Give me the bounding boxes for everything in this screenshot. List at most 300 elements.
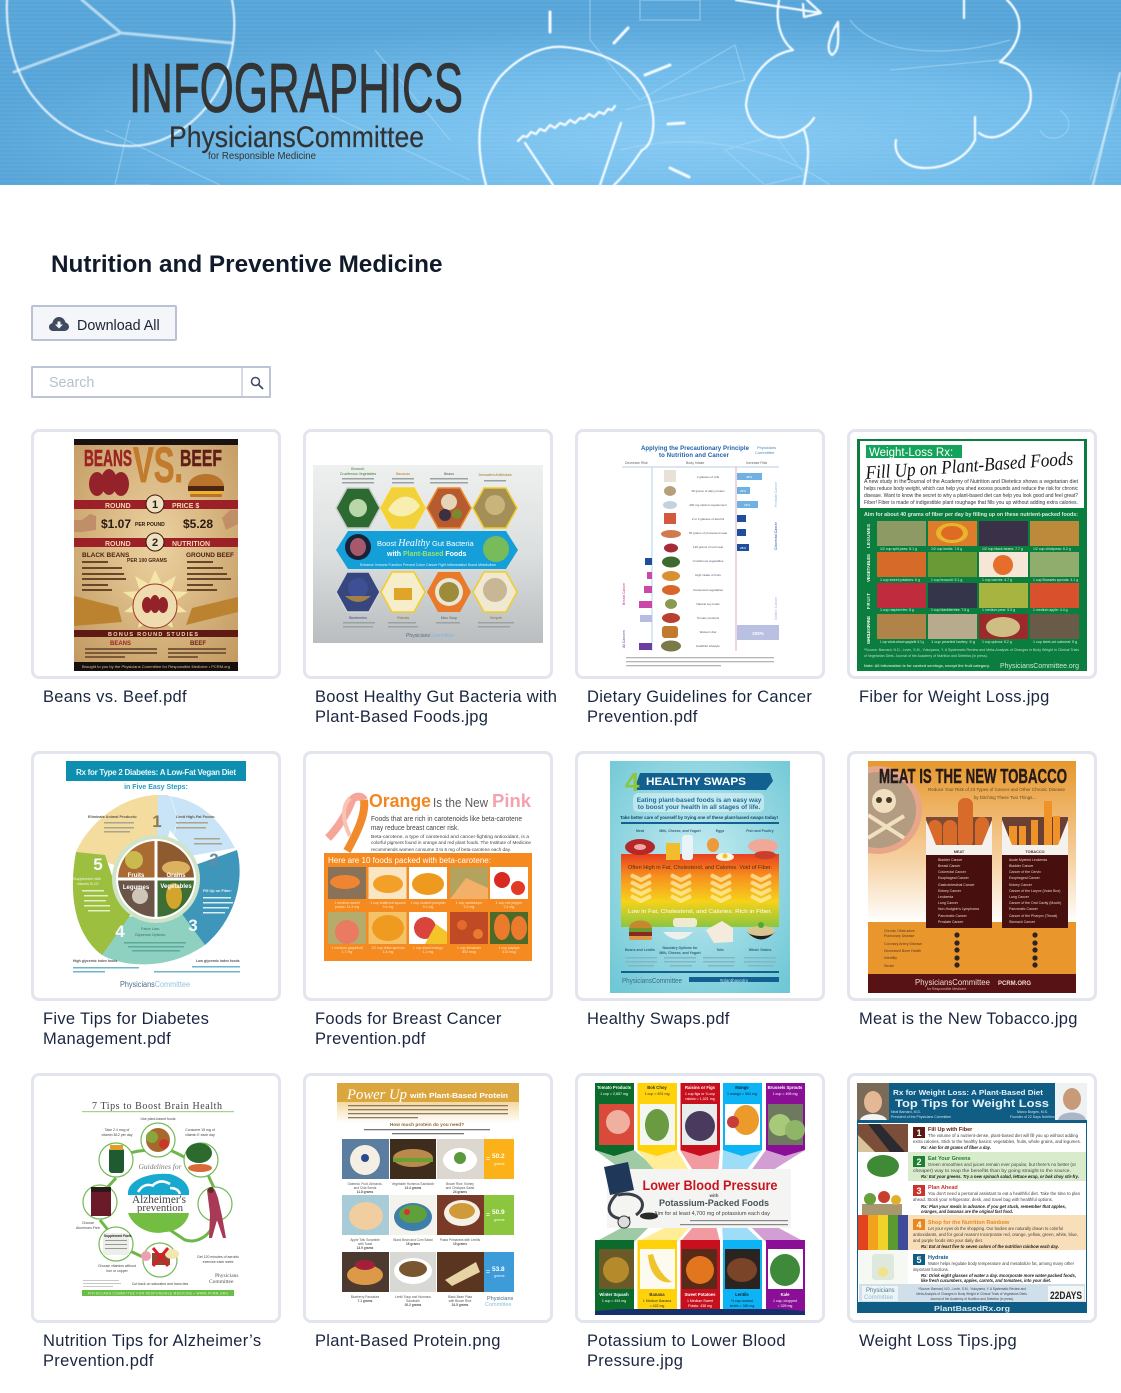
thumbnail: beans vs beef poster: ROUND — [105, 503, 131, 510]
thumbnail: meat tobacco poster: PCRM.ORG — [998, 981, 1031, 987]
thumbnail: weight loss tips poster: Rx: Aim for 40 grams of fiber a day. — [921, 1145, 991, 1150]
thumbnail: meat tobacco poster: Bladder Cancer — [938, 858, 963, 862]
caption: Weight Loss Tips.jpg — [859, 1332, 1017, 1350]
thumbnail: weight loss tips poster: Rx: Plan your meals in advance. If you get stuck, remember that apples, — [921, 1204, 1066, 1209]
thumbnail: gut bacteria poster: Blueberries — [349, 616, 367, 620]
thumbnail: weight loss tips poster: Fill Up with Fiber — [928, 1127, 973, 1133]
thumbnail: weight loss tips poster: oranges, and bananas are the original fast food. — [921, 1209, 1013, 1214]
caption — [587, 1332, 786, 1370]
thumbnail: meat tobacco poster: Kidney Cancer — [938, 889, 962, 893]
thumbnail: precautionary principle chart: Committee — [755, 450, 775, 455]
thumbnail: diabetes wheel: 1 — [152, 812, 162, 831]
thumbnail: precautionary principle chart: 28% — [740, 546, 746, 550]
thumbnail: fiber poster: 1 cup sweet potatoes: 6 g — [880, 578, 920, 582]
thumbnail: precautionary principle chart: to Nutrition and Cancer — [659, 453, 730, 459]
thumbnail: potassium poster: Sweet Potatoes — [685, 1292, 716, 1297]
thumbnail: potassium poster: Aim for at least 4,700 mg of potassium each day — [654, 1211, 770, 1217]
thumbnail: weight loss tips poster: Hydrate — [928, 1255, 948, 1261]
thumbnail: beans vs beef poster: NUTRITION — [172, 541, 210, 548]
thumbnail: fiber poster: Fiber! Fiber is made of indigestible plant roughage that fills you up without adding extra calories. — [864, 500, 1078, 506]
thumbnail: potassium poster: Banana — [649, 1292, 665, 1297]
thumbnail: plant-based protein poster: 19 grams — [453, 1242, 467, 1246]
thumbnail: beans vs beef poster: 1 — [152, 499, 158, 511]
thumbnail: gut bacteria poster: with Plant-Based Foods — [386, 551, 466, 558]
thumbnail: alzheimer's tips: vitamin E each day — [185, 1133, 215, 1137]
thumbnail: plant-based protein poster: 50.2 — [492, 1153, 505, 1160]
caption: Potassium to Lower Blood — [587, 1332, 786, 1350]
thumbnail: precautionary principle chart: 2 to 3 glasses of alcohol — [692, 517, 724, 521]
thumbnail: orange is the new pink: 802 mcg — [462, 950, 476, 954]
thumbnail: plant-based protein poster: Oatmeal, Fruit, Almonds, — [347, 1182, 383, 1186]
thumbnail: gut bacteria poster — [313, 465, 543, 643]
logo: infographics wordmark: PhysiciansCommittee — [169, 121, 424, 154]
thumbnail: alzheimer's tips — [76, 1101, 239, 1296]
thumbnail: diabetes wheel: High glycemic index foods — [73, 959, 117, 963]
thumbnail: orange is the new pink: 1.1 mg — [423, 950, 433, 954]
thumbnail: weight loss tips poster: cheaper) way to reap the benefits than by going straight to the source. — [913, 1168, 1071, 1173]
thumbnail: alzheimer's tips: exercise each week — [203, 1260, 234, 1264]
thumbnail: alzheimer's tips: Guidelines for — [138, 1162, 182, 1171]
thumbnail: precautionary principle chart: Breast Cancer — [622, 582, 626, 605]
thumbnail: orange is the new pink: 1 cup papaya — [498, 946, 520, 950]
thumbnail: plant-based protein poster: How much protein do you need? — [390, 1122, 464, 1128]
thumbnail: weight loss tips poster: Top Tips for Weight Loss — [895, 1098, 1049, 1110]
thumbnail: fiber poster: 1 cup raspberries: 8 g — [880, 608, 914, 612]
thumbnail: potassium poster: = 329 mg — [778, 1304, 792, 1308]
thumbnail: alzheimer's tips: Physicians — [215, 1273, 239, 1279]
thumbnail: weight loss tips poster: Eat Your Greens — [928, 1156, 971, 1162]
thumbnail: healthy swaps poster: Often High in Fat, Cholesterol, and Calories. Void of Fiber. — [628, 865, 772, 871]
thumbnail: alzheimer's tips: prevention — [137, 1203, 184, 1214]
thumbnail: orange is the new pink: 1 medium grapefruit — [331, 946, 363, 950]
thumbnail: potassium poster: Brussels Sprouts — [768, 1085, 803, 1090]
caption: Pressure.jpg — [587, 1352, 683, 1370]
thumbnail: weight loss tips poster: antioxidants, and for good reason! Incorporate red, orange, yellow, green, white, blue, — [913, 1232, 1078, 1237]
thumbnail: orange is the new pink: 1 cup butternut squash — [370, 901, 406, 905]
card: Five Tips for Diabetes — [31, 751, 281, 1048]
thumbnail: healthy swaps poster: Eating plant-based foods is an easy way — [637, 797, 762, 804]
thumbnail: diabetes wheel: vitamin B-12: — [77, 882, 99, 886]
thumbnail: fiber poster: 1 medium apple: 4.4 g — [1033, 608, 1068, 612]
thumbnail: diabetes wheel: Glycemic Options: — [135, 933, 166, 937]
thumbnail: plant-based protein poster: with Plant-Based Protein — [409, 1091, 508, 1100]
thumbnail: precautionary principle chart: Carotenoid vegetables — [693, 588, 724, 592]
thumbnail: fiber poster: LEGUMES — [866, 524, 871, 548]
thumbnail: plant-based protein poster: Black Bean Pitas — [448, 1295, 472, 1299]
thumbnail: gut bacteria poster: Beans — [444, 472, 454, 476]
caption: Dietary Guidelines for Cancer — [587, 688, 812, 706]
thumbnail: plant-based protein poster: grams — [494, 1274, 505, 1278]
thumbnail: potassium poster: 1 cup, chopped — [773, 1299, 797, 1303]
thumbnail: meat tobacco poster: PhysiciansCommittee — [915, 977, 990, 987]
card: Beans vs Beef — [31, 429, 281, 706]
caption: Plant-Based Foods.jpg — [315, 708, 488, 726]
thumbnail: orange is the new pink: may reduce breast cancer risk. — [371, 825, 459, 832]
thumbnail: orange is the new pink: Here are 10 foods packed with beta-carotene: — [328, 856, 491, 865]
thumbnail: potassium poster: 1 cup = 495 mg — [773, 1092, 797, 1096]
thumbnail: plant-based protein poster: Black Bean and Corn Salad — [393, 1238, 433, 1242]
thumbnail: plant-based protein poster: 7.1 grams — [358, 1299, 373, 1303]
card: Boost Healthy Gut Bacteria — [303, 429, 557, 726]
thumbnail: gut bacteria poster: Bananas — [396, 472, 410, 476]
thumbnail: weight loss tips poster: ahead. Stock your refrigerator, desk, and travel bag with healthful options. — [913, 1197, 1053, 1202]
thumbnail: potassium poster: 1 cup = 494 mg — [602, 1299, 626, 1303]
thumbnail: beans vs beef poster: ROUND — [105, 541, 131, 548]
thumbnail: meat tobacco poster: Chronic Obstructive — [884, 929, 915, 933]
thumbnail: fiber poster: WHOLE GRAINS — [866, 616, 871, 644]
thumbnail: orange is the new pink: potato: 11.3 mg — [335, 905, 359, 909]
thumbnail: beans vs beef poster: BLACK BEANS — [82, 552, 130, 559]
thumbnail: healthy swaps poster: 4 — [625, 767, 640, 797]
button label: Download All — [77, 318, 160, 334]
thumbnail: alzheimer's tips: Choose vitamins without — [98, 1264, 136, 1268]
thumbnail: beans vs beef poster: BEANS — [84, 445, 132, 471]
card: Foods for Breast Cancer — [303, 751, 553, 1048]
thumbnail: alzheimer's tips: Get 120 minutes of aerobic — [197, 1255, 239, 1259]
thumbnail: potassium poster: Bok Choy — [647, 1085, 667, 1090]
card: Weight Loss Tips — [847, 1073, 1097, 1350]
thumbnail: weight loss tips poster: Physicians — [866, 1288, 895, 1294]
thumbnail: meat tobacco poster: Stomach Cancer — [1009, 920, 1036, 924]
thumbnail: healthy swaps poster: Eggs — [716, 829, 724, 833]
thumbnail: plant-based protein poster: 14.4 grams — [405, 1186, 422, 1190]
thumbnail: meat tobacco poster: by Ditching These Two Things... — [974, 795, 1036, 801]
thumbnail: potassium poster — [595, 1083, 805, 1315]
thumbnail: healthy swaps poster: Take better care of yourself by trying one of these plant-based swaps today! — [620, 815, 778, 820]
caption: Five Tips for Diabetes — [43, 1010, 209, 1028]
thumbnail: orange is the new pink: 1/2 cup dried apricots — [371, 946, 405, 950]
caption — [587, 688, 812, 726]
thumbnail: fiber poster: VEGETABLES — [866, 554, 871, 582]
thumbnail: beans vs beef poster: $1.07 — [101, 517, 131, 531]
caption: Foods for Breast Cancer — [315, 1010, 502, 1028]
thumbnail: fiber poster: Weight-Loss Rx: — [869, 447, 953, 459]
thumbnail: beans vs beef poster: Brought to you by the Physicians Committee for Responsible Medicine • PCRM.org — [82, 664, 230, 669]
thumbnail: beans vs beef poster: GROUND BEEF — [186, 552, 234, 559]
search box — [31, 366, 271, 398]
thumbnail: diabetes wheel: Eliminate Animal Products: — [88, 815, 137, 819]
thumbnail: alzheimer's tips: Supplement Facts — [104, 1234, 132, 1238]
thumbnail: meat tobacco poster: Breast Cancer — [938, 864, 961, 868]
thumbnail: weight loss tips poster: The volume of a nutrient-dense, plant-based diet will fill you up without adding — [928, 1133, 1079, 1138]
thumbnail: meat tobacco poster: Lung Cancer — [938, 901, 959, 905]
thumbnail: fiber poster: *Source: Barnard, N.D., Levin, S.M., Yokoyama, Y. A Systematic Review and Meta-Analysis of Changes in Body Weight in Clinical Trials — [864, 648, 1079, 652]
thumbnail: fiber poster: A new study in the Journal of the Academy of Nutrition and Dietetics shows a vegetarian diet — [864, 479, 1079, 485]
thumbnail: meat tobacco poster: Pulmonary Disease — [884, 934, 914, 938]
thumbnail: healthy swaps poster: to boost your health in all stages of life. — [638, 804, 760, 811]
thumbnail: potassium poster: lentils = 365 mg — [730, 1304, 754, 1308]
thumbnail: potassium poster: Potato: 438 mg — [688, 1304, 712, 1308]
thumbnail: orange is the new pink: 1 cup red pepper — [496, 901, 523, 905]
thumbnail: fiber poster: 1 cup Brussels sprouts: 4.1 g — [1033, 578, 1078, 582]
thumbnail: diabetes wheel: 2 — [209, 850, 219, 869]
thumbnail: plant-based protein poster: and Chickpea Salad — [446, 1186, 474, 1190]
caption — [43, 1010, 209, 1048]
thumbnail: weight loss tips poster: 2 — [916, 1157, 922, 1167]
thumbnail: weight loss tips poster: PlantBasedRx.org — [934, 1306, 1010, 1313]
thumbnail: fiber poster: 1 medium pear: 5.5 g — [982, 608, 1015, 612]
thumbnail: weight loss tips poster: Committee — [864, 1295, 894, 1301]
thumbnail: fiber poster: 1 cup pearled barley: 6 g — [931, 640, 975, 644]
thumbnail: alzheimer's tips: Consume 15 mg of — [185, 1128, 215, 1132]
thumbnail: healthy swaps poster: Beans and Lentils — [625, 948, 655, 952]
thumbnail: weight loss tips poster: Founder of 22 Days Nutrition — [1010, 1115, 1055, 1119]
thumbnail: precautionary principle chart: Natural soy foods — [696, 602, 720, 606]
caption: Management.pdf — [43, 1030, 171, 1048]
thumbnail: precautionary principle chart: Prostate Cancer — [774, 481, 778, 507]
thumbnail: meat tobacco poster — [868, 761, 1076, 993]
card: Plant-Based Protein — [303, 1073, 553, 1350]
thumbnail: precautionary principle chart: Colorectal Cancer — [774, 521, 778, 550]
thumbnail: healthy swaps poster: Milk, Cheese, and Yogurt — [659, 829, 701, 833]
thumbnail: healthy swaps poster: #plantbasedrx — [720, 978, 749, 983]
thumbnail: precautionary principle chart: 35 grams of dairy protein — [691, 489, 725, 493]
thumbnail: weight loss tips poster: Rx: Eat at least five to seven colors of the nutrition rainbow each day. — [921, 1244, 1059, 1249]
thumbnail: alzheimer's tips: Use plant-based foods — [140, 1117, 176, 1121]
thumbnail: precautionary principle chart: Body Intake — [686, 461, 705, 465]
thumbnail: weight loss tips poster: Rx for Weight Loss: A Plant-Based Diet — [893, 1090, 1044, 1097]
thumbnail: fiber poster: PhysiciansCommittee.org — [1000, 661, 1079, 670]
thumbnail: weight loss tips poster: like fresh cucumbers, apples, carrots, and tomatoes, into your diet. — [921, 1278, 1051, 1283]
thumbnail: orange is the new pink: 414 mcg — [502, 950, 516, 954]
thumbnail: orange is the new pink: 1 cup cantaloupe — [456, 901, 482, 905]
thumbnail: meat tobacco poster: Bladder Cancer — [1009, 864, 1034, 868]
thumbnail: weight loss tips poster: Let your eyes do the shopping. Our bodies are naturally drawn to colorful — [928, 1226, 1063, 1231]
thumbnail: precautionary principle chart — [622, 445, 779, 666]
thumbnail: precautionary principle chart: 400 mg calcium supplement — [689, 503, 727, 507]
thumbnail: beans vs beef poster: BONUS ROUND STUDIES — [108, 632, 198, 638]
thumbnail: diabetes wheel: Limit High-Fat Foods: — [176, 815, 215, 819]
thumbnail: fiber poster: 1 cup broccoli: 5.1 g — [931, 578, 962, 582]
thumbnail: alzheimer's tips: vitamin B12 per day — [102, 1133, 133, 1137]
thumbnail: healthy swaps poster: HEALTHY SWAPS — [646, 776, 746, 788]
thumbnail: potassium poster: Potassium-Packed Foods — [659, 1198, 769, 1209]
thumbnail: weight loss tips poster: Plan Ahead — [928, 1185, 958, 1191]
thumbnail: precautionary principle chart: Decrease Risk — [625, 461, 648, 465]
thumbnail: orange is the new pink: 1 cup cooked pumpkin — [410, 901, 446, 905]
thumbnail: potassium poster: = 422 mg — [650, 1304, 664, 1308]
thumbnail: plant-based protein poster: Lentil Soup and Hummus — [395, 1295, 431, 1299]
thumbnail: precautionary principle chart: Gastric Cancer — [774, 596, 778, 620]
thumbnail: beans vs beef poster: VS. — [133, 437, 183, 493]
thumbnail: beans vs beef poster: PRICE $ — [172, 503, 199, 510]
card: Dietary Guidelines — [575, 429, 825, 726]
thumbnail: potassium poster: 1 cup figs or ¾ cup — [685, 1092, 715, 1096]
thumbnail: potassium poster: Mango — [735, 1085, 749, 1090]
thumbnail: precautionary principle chart: Tomato products — [697, 616, 720, 620]
thumbnail: potassium poster: 1 Medium Sweet — [687, 1299, 713, 1303]
thumbnail: healthy swaps poster: Milk, Cheese, and Yogurt — [659, 951, 701, 955]
thumbnail: alzheimer's tips: 7 Tips to Boost Brain Health — [92, 1101, 222, 1112]
thumbnail: orange is the new pink: 9.1 mg — [423, 905, 433, 909]
caption — [43, 1332, 261, 1370]
thumbnail: potassium poster: 1 cup = 2,657 mg — [600, 1092, 628, 1096]
thumbnail: beans vs beef poster: 2 — [152, 537, 158, 549]
thumbnail: diabetes wheel: Low glycemic index foods — [196, 959, 240, 963]
thumbnail: potassium poster: with — [708, 1193, 719, 1198]
thumbnail: potassium poster: Raisins or Figs — [685, 1085, 716, 1090]
thumbnail: fiber poster: 1 cup quinoa: 5.2 g — [982, 640, 1012, 644]
thumbnail: orange is the new pink: 1 cup sliced mango — [413, 946, 443, 950]
card: Fiber for Weight Loss — [847, 429, 1097, 706]
icon: magnifier — [241, 368, 271, 396]
thumbnail: healthy swaps poster: PhysiciansCommittee — [622, 978, 682, 985]
thumbnail: weight loss tips poster: Green smoothies and juices remain ever popular, but there's no better (or — [928, 1162, 1077, 1167]
thumbnail: orange is the new pink: 1.4 mg — [383, 950, 393, 954]
caption: Healthy Swaps.pdf — [587, 1010, 730, 1028]
thumbnail: plant-based protein poster: 24 grams — [453, 1190, 467, 1194]
thumbnail: fiber poster: 1/2 cup lentils: 7.8 g — [931, 547, 962, 551]
thumbnail: precautionary principle chart: All Cancers — [622, 630, 626, 648]
thumbnail: plant-based protein poster: Blueberry Pancakes — [351, 1295, 380, 1299]
thumbnail: alzheimer's tips: Take 2.4 mcg of — [105, 1128, 129, 1132]
thumbnail: meat tobacco poster: Gastrointestinal Cancer — [938, 883, 975, 887]
thumbnail: meat tobacco poster: Non-Hodgkin's Lymphoma — [938, 907, 979, 911]
thumbnail: healthy swaps poster: Tofu — [716, 948, 724, 952]
caption: Meat is the New Tobacco.jpg — [859, 1010, 1078, 1028]
thumbnail: precautionary principle chart: 2 glasses of milk — [697, 475, 720, 479]
thumbnail: fiber poster: Note: All information is for cooked servings, except the fruit category. — [864, 664, 990, 668]
thumbnail: orange is the new pink: colorful pigment found in orange and red plant foods. The Institute of Medicine — [371, 840, 531, 845]
thumbnail: beans vs beef poster: BEANS — [110, 641, 131, 647]
thumbnail: meat tobacco poster: Pancreatic Cancer — [938, 914, 968, 918]
thumbnail: weight loss tips poster: Journal of the Academy of Nutrition and Dietetics (in press). — [930, 1297, 1014, 1301]
thumbnail: healthy swaps poster: Low in Fat, Cholesterol, and Calories. Rich in Fiber. — [628, 909, 773, 915]
thumbnail: meat tobacco poster: Leukemia — [938, 895, 953, 899]
caption: Plant-Based Protein.png — [315, 1332, 501, 1350]
thumbnail: diabetes wheel: Fill Up on Fiber: — [203, 889, 232, 893]
thumbnail: meat tobacco poster: Esophageal Cancer — [938, 876, 970, 880]
thumbnail: potassium poster: 1 mango = 564 mg — [727, 1092, 757, 1096]
thumbnail: beans vs beef poster: BEEF — [190, 641, 206, 647]
thumbnail: precautionary principle chart: Healthful Lifestyle — [696, 644, 720, 648]
thumbnail: plant-based protein poster: grams — [494, 1218, 505, 1222]
thumbnail: beans vs beef poster: PER POUND — [135, 522, 165, 528]
thumbnail: meat tobacco poster: Coronary Artery Disease — [884, 942, 922, 946]
thumbnail: diabetes wheel: Favor Low- — [141, 927, 161, 931]
thumbnail: meat tobacco poster: Kidney Cancer — [1009, 883, 1033, 887]
thumbnail: meat tobacco poster: Reduce Your Risk of 23 Types of Cancer and Other Chronic Disease — [928, 787, 1065, 793]
thumbnail: fiber poster: 1 cup steel-cut oatmeal: 5 g — [1033, 640, 1077, 644]
thumbnail: weight loss tips poster: *Source: Barnard, N.D., Levin, S.M., Yokoyama, Y. A Systematic Review and — [918, 1287, 1026, 1291]
thumbnail: gut bacteria poster: Jerusalem Artichokes — [478, 473, 512, 477]
thumbnail: plant-based protein poster: Committee — [485, 1302, 512, 1308]
thumbnail: diabetes wheel: PhysiciansCommittee — [120, 980, 190, 989]
thumbnail: fiber poster: 1/2 cup split peas: 8.1 g — [880, 547, 917, 551]
card: Nutrition Tips for Alzheimer's — [31, 1073, 281, 1370]
thumbnail: potassium poster: 1 cup = 631 mg — [645, 1092, 669, 1096]
thumbnail: precautionary principle chart: Cruciferous vegetables — [693, 559, 724, 563]
card: Potassium — [575, 1073, 825, 1370]
logo: infographics wordmark: INFOGRAPHICS — [129, 49, 463, 127]
header banner — [0, 0, 1121, 185]
thumbnail: orange is the new pink: 1.7 mg — [342, 950, 352, 954]
thumbnail: gut bacteria poster: Enhance Immune Function Prevent Colon Cancer Fight Inflammation Boost Metabolism — [360, 563, 496, 567]
thumbnail: gut bacteria poster: Cruciferous Vegetables — [340, 472, 376, 476]
thumbnail: orange is the new pink: recommends women consume 3 to 6 mg of beta-carotene each day. — [371, 847, 511, 852]
thumbnail: meat tobacco poster: for Responsible Medicine — [927, 987, 966, 991]
thumbnail: plant-based protein poster: Apple Tofu Scramble — [350, 1238, 380, 1242]
thumbnail: weight loss tips poster: 22DAYS — [1050, 1290, 1082, 1302]
thumbnail: weight loss tips poster: You don't need a personal assistant to eat a healthful diet. Take the time to plan — [928, 1191, 1081, 1196]
thumbnail: meat tobacco poster: MEAT — [954, 850, 965, 854]
thumbnail: fiber poster: 1 cup blackberries: 7.6 g — [931, 608, 969, 612]
thumbnail: orange is the new pink: 2.4 mg — [504, 905, 514, 909]
thumbnail: diabetes wheel: 3 — [188, 916, 198, 935]
thumbnail: precautionary principle chart: 200% — [752, 631, 764, 636]
thumbnail: plant-based protein poster: 50.9 — [492, 1209, 505, 1216]
thumbnail: potassium poster: Lower Blood Pressure — [642, 1178, 778, 1193]
thumbnail: weight loss tips poster: Neal Barnard, M.D. — [891, 1110, 921, 1114]
thumbnail: precautionary principle chart: 32% — [744, 503, 750, 507]
thumbnail: potassium poster: 1 Medium Banana — [643, 1299, 671, 1303]
thumbnail: alzheimer's tips: Aluminum-Free — [76, 1226, 100, 1230]
thumbnail: potassium poster: Lentils — [735, 1292, 749, 1297]
thumbnail: precautionary principle chart: 48% — [746, 475, 752, 479]
thumbnail: plant-based protein poster: Physicians — [487, 1296, 514, 1302]
thumbnail: healthy swaps poster — [610, 761, 790, 993]
caption: Prevention.pdf — [587, 708, 698, 726]
thumbnail: precautionary principle chart: 50 grams of processed meat — [689, 531, 727, 535]
caption: Boost Healthy Gut Bacteria with — [315, 688, 557, 706]
thumbnail: plant-based protein poster: Sandwich — [406, 1299, 420, 1303]
search placeholder: Search — [49, 375, 94, 391]
thumbnail: gut bacteria poster: PhysiciansCommittee — [406, 633, 454, 639]
thumbnail: potassium poster: Tomato Products — [597, 1085, 632, 1090]
thumbnail: beans vs beef poster: BEEF — [180, 445, 222, 471]
thumbnail: weight loss tips poster: extra calories. Stick to the healthy basics: vegetables, fruits, whole grains, and legumes. — [913, 1139, 1081, 1144]
thumbnail: fiber poster: Aim for about 40 grams of fiber per day by filling up on these nutrient-packed foods: — [864, 512, 1078, 518]
thumbnail: diabetes wheel: 5 — [93, 855, 103, 874]
caption: Fiber for Weight Loss.jpg — [859, 688, 1050, 706]
thumbnail: weight loss tips poster: 5 — [916, 1255, 922, 1265]
thumbnail: plant-based protein poster — [337, 1083, 519, 1308]
thumbnail: meat tobacco poster: Decreased Bone Health — [884, 949, 921, 953]
thumbnail: plant-based protein poster: grams — [494, 1162, 505, 1166]
thumbnail: orange is the new pink: Pink — [492, 791, 532, 811]
thumbnail: weight loss tips poster: Rx: Eat your greens. Try a new spinach salad, lettuce wrap, or bok choy stir-fry. — [921, 1174, 1079, 1179]
thumbnail: diabetes wheel: Vegetables — [160, 884, 192, 890]
thumbnail: gut bacteria poster: Miso Soup — [441, 616, 457, 620]
thumbnail: plant-based protein poster: with Toast — [358, 1242, 372, 1246]
thumbnail: diabetes wheel: Fruits — [128, 873, 145, 879]
thumbnail: fiber poster: 1 cup carrots: 4.7 g — [982, 578, 1012, 582]
thumbnail: gut bacteria poster: Tempeh — [490, 616, 502, 620]
caption: Prevention.pdf — [43, 1352, 154, 1370]
thumbnail: precautionary principle chart: 120 grams of red meat — [693, 545, 723, 549]
logo: infographics wordmark — [129, 49, 463, 162]
caption: Beans vs. Beef.pdf — [43, 688, 187, 706]
thumbnail: orange is the new pink: 1 medium sweet — [334, 901, 360, 905]
thumbnail: alzheimer's tips: Choose — [82, 1221, 94, 1225]
download all button — [31, 305, 177, 341]
thumbnail: meat tobacco poster: Prostate Cancer — [938, 920, 964, 924]
thumbnail: fiber poster: 1/2 cup chickpeas: 6.2 g — [1033, 547, 1071, 551]
thumbnail: diabetes wheel: Grains — [166, 873, 186, 879]
doodle strokes — [7, 0, 234, 146]
icon: cloud download — [49, 317, 69, 331]
thumbnail: plant-based protein poster: with Brown Rice — [449, 1299, 472, 1303]
caption — [315, 1010, 502, 1048]
thumbnail: potassium poster: Winter Squash — [599, 1292, 629, 1297]
thumbnail: gut bacteria poster: Polenta — [397, 616, 409, 620]
thumbnail: plant-based protein poster: and Chia Seeds — [354, 1186, 377, 1190]
thumbnail: beans vs beef poster: PER 100 GRAMS — [127, 558, 168, 564]
thumbnail: plant-based protein poster: Power Up — [346, 1087, 407, 1103]
thumbnail: weight loss tips poster: 3 — [916, 1186, 922, 1196]
thumbnail: plant-based protein poster: = — [486, 1269, 490, 1276]
caption — [315, 688, 557, 726]
